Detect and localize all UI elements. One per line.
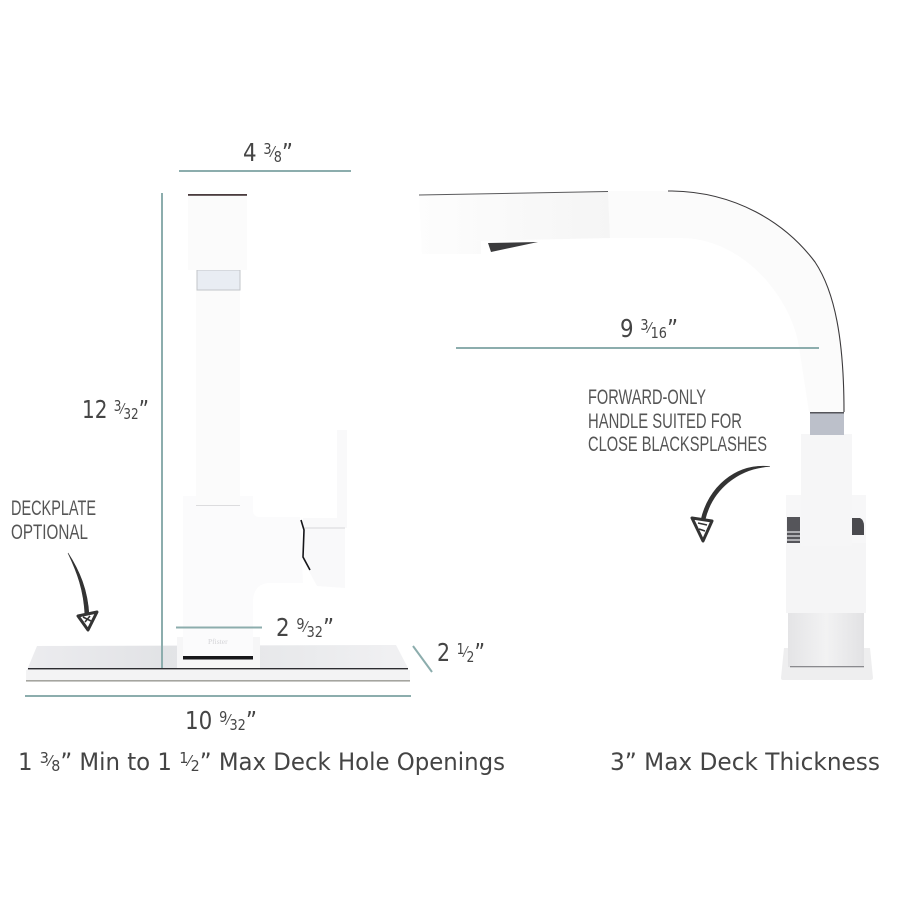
label: 10 9/32: 32 bbox=[229, 716, 246, 734]
label: 4 3/8: ⁄ bbox=[269, 143, 277, 161]
note: deckplate optional: OPTIONAL bbox=[11, 520, 88, 544]
arrow: handle note bbox=[692, 466, 770, 541]
deckplate bbox=[26, 645, 410, 682]
note: forward-only handle bbox=[588, 385, 767, 456]
spout stem bbox=[188, 194, 247, 505]
label: 4 3/8: ” bbox=[282, 138, 293, 167]
note: deckplate optional: DECKPLATE bbox=[11, 496, 96, 520]
label: 2 9/32: 2 bbox=[276, 613, 292, 642]
label: 12 3/32: ⁄ bbox=[119, 400, 126, 418]
dimension line: base 2 9/32 bbox=[176, 626, 262, 628]
dimension line: height 12 3/32 bbox=[161, 193, 163, 668]
label: 2 9/32: ” bbox=[323, 613, 334, 642]
caption: deck hole openings: ⁄ bbox=[46, 752, 55, 770]
label: 10 9/32: ” bbox=[246, 706, 257, 735]
label: 2 1/2: ” bbox=[474, 638, 485, 667]
pull-down spray head bbox=[419, 191, 610, 254]
caption: deck hole openings: ” Max Deck Hole Openings bbox=[200, 748, 505, 776]
dimension line: deckplate 10 9/32 bbox=[25, 695, 411, 697]
label: 2 1/2: 2 bbox=[467, 648, 474, 666]
caption: deck hole openings: 3 bbox=[40, 749, 49, 767]
handle lever bbox=[301, 430, 347, 588]
label: 2 1/2: 1 bbox=[457, 640, 464, 658]
brand mark: Pfister bbox=[208, 637, 228, 646]
base column bbox=[781, 412, 873, 680]
curved spout bbox=[608, 191, 844, 412]
label: 10 9/32: 10 bbox=[185, 706, 217, 735]
note: forward-only handle: CLOSE BLACKSPLASHES bbox=[588, 432, 767, 456]
caption: deck thickness: 3” Max Deck Thickness bbox=[610, 748, 880, 776]
label: 2 9/32: 9 bbox=[296, 615, 305, 633]
label: 9 3/16: 16 bbox=[651, 324, 667, 342]
label: 4 3/8: 8 bbox=[274, 148, 282, 166]
caption: deck hole openings: 8 bbox=[51, 757, 60, 775]
note: deckplate optional bbox=[11, 496, 96, 544]
label: 2 9/32: ⁄ bbox=[302, 618, 310, 636]
label: 2 1/2: ⁄ bbox=[462, 643, 469, 661]
label: 9 3/16: ” bbox=[667, 314, 678, 343]
label: 10 9/32: 9 bbox=[219, 708, 227, 726]
dimension line: reach 9 3/16 bbox=[456, 347, 819, 349]
caption: deck hole openings: ⁄ bbox=[185, 752, 194, 770]
caption: deck hole openings: 1 bbox=[18, 748, 33, 776]
right faucet side view bbox=[419, 191, 873, 680]
dimension line: width 4 3/8 bbox=[179, 170, 351, 172]
faucet base and body bbox=[177, 496, 303, 668]
label: 9 3/16: ⁄ bbox=[646, 319, 654, 337]
label: 4 3/8: 4 bbox=[243, 138, 259, 167]
label: 10 9/32: ⁄ bbox=[225, 711, 232, 729]
label: 12 3/32: 32 bbox=[123, 405, 139, 423]
label: 9 3/16: 9 bbox=[620, 314, 636, 343]
arrow: deckplate note bbox=[68, 553, 97, 630]
label: 2 9/32: 32 bbox=[307, 623, 323, 641]
dimension line: deckplate 2 1/2 bbox=[413, 646, 432, 672]
left faucet front view bbox=[26, 194, 410, 682]
label: 12 3/32: ” bbox=[139, 395, 149, 424]
label: 9 3/16: 3 bbox=[640, 316, 649, 334]
label: 12 3/32: 12 bbox=[82, 395, 114, 424]
caption: deck hole openings: ” Min to 1 bbox=[60, 748, 179, 776]
note: forward-only handle: HANDLE SUITED FOR bbox=[588, 409, 742, 433]
caption: deck hole openings: 1 bbox=[179, 749, 188, 767]
label: 2 1/2: 2 bbox=[437, 638, 453, 667]
label: 12 3/32: 3 bbox=[114, 397, 121, 415]
note: forward-only handle: FORWARD-ONLY bbox=[588, 385, 706, 409]
caption: deck hole openings: 2 bbox=[191, 757, 200, 775]
label: 4 3/8: 3 bbox=[263, 140, 272, 158]
